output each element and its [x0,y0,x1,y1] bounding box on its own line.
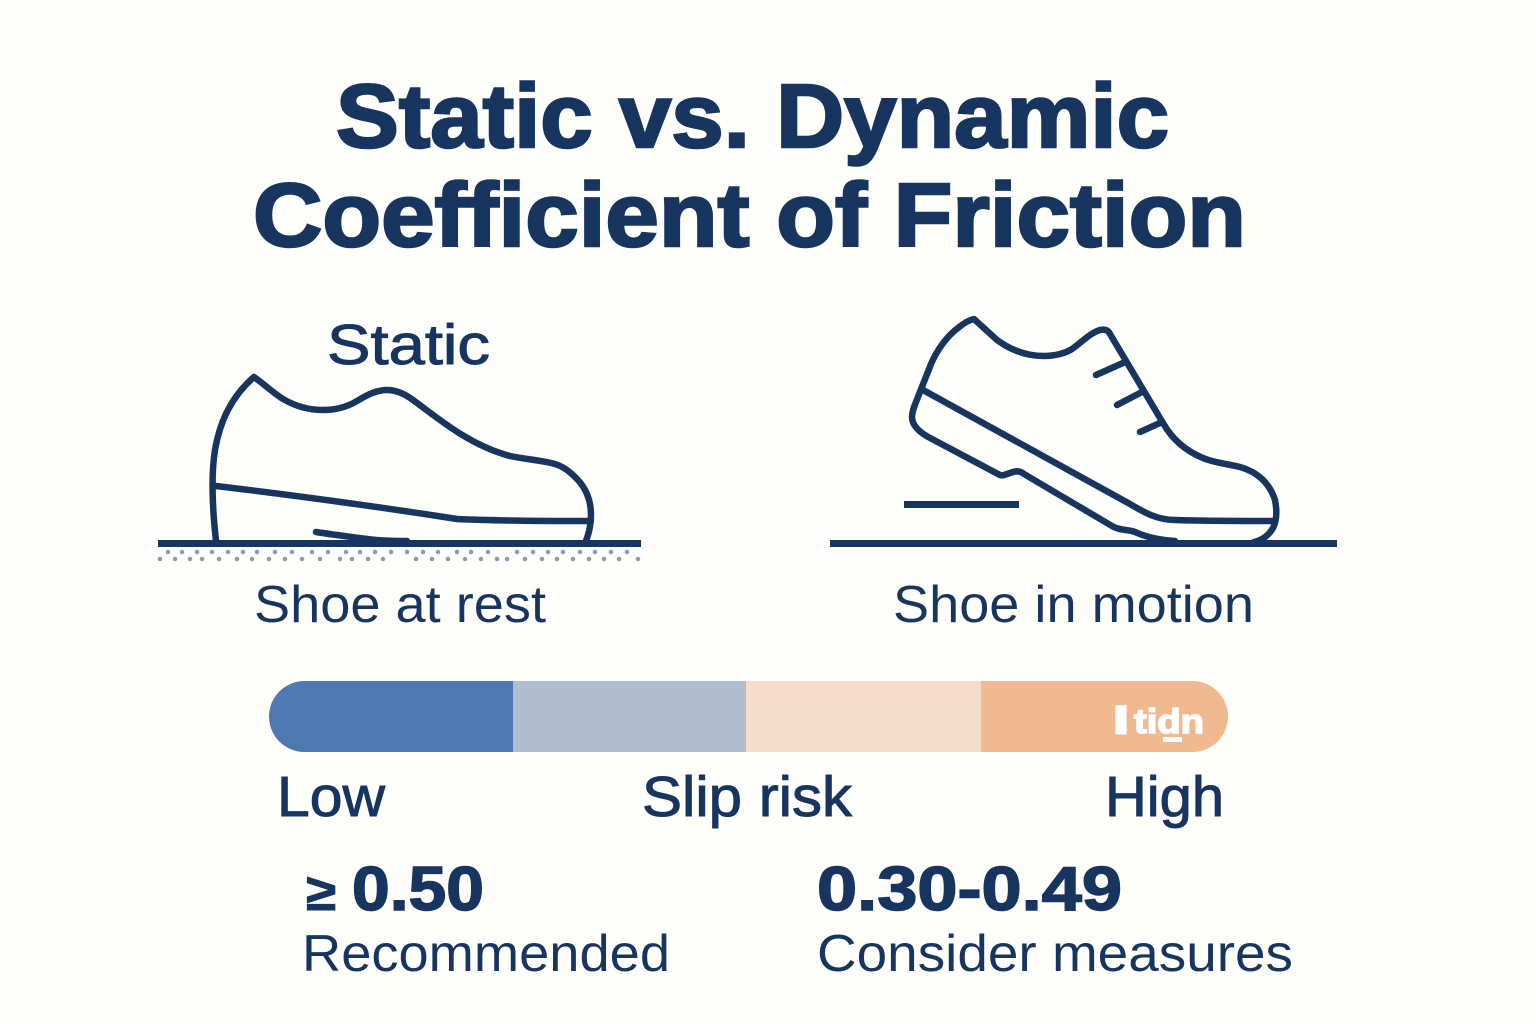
scale label: slip risk: Slip risk [642,765,853,829]
caption: shoe in motion: Shoe in motion [893,576,1254,634]
slip risk gradient bar [269,681,1228,752]
threshold: consider measures: 0.30-0.49 [817,855,1122,924]
ground texture [160,552,638,559]
icon: static shoe on ground [158,377,641,559]
scale label: high: High [1105,765,1224,829]
scale label: low: Low [277,765,386,829]
heading: static: Static [327,313,490,377]
threshold: consider measures: Consider measures [817,925,1293,983]
title: Coefficient of Friction [253,166,1246,266]
title [253,67,1246,266]
bar watermark text [1114,700,1204,742]
caption: shoe at rest: Shoe at rest [254,576,547,634]
icon: moving shoe [830,319,1337,547]
bar watermark text: I [1114,700,1128,742]
threshold: recommended: 0.50 [352,855,484,924]
ground line [830,540,1337,547]
title: Static vs. Dynamic [336,67,1169,167]
bar watermark text: tidn [1134,703,1204,741]
threshold: recommended [302,855,670,983]
threshold: consider measures [817,855,1293,983]
threshold: recommended: ≥ [306,864,336,922]
threshold: recommended: Recommended [302,925,670,983]
motion line [904,501,1019,508]
